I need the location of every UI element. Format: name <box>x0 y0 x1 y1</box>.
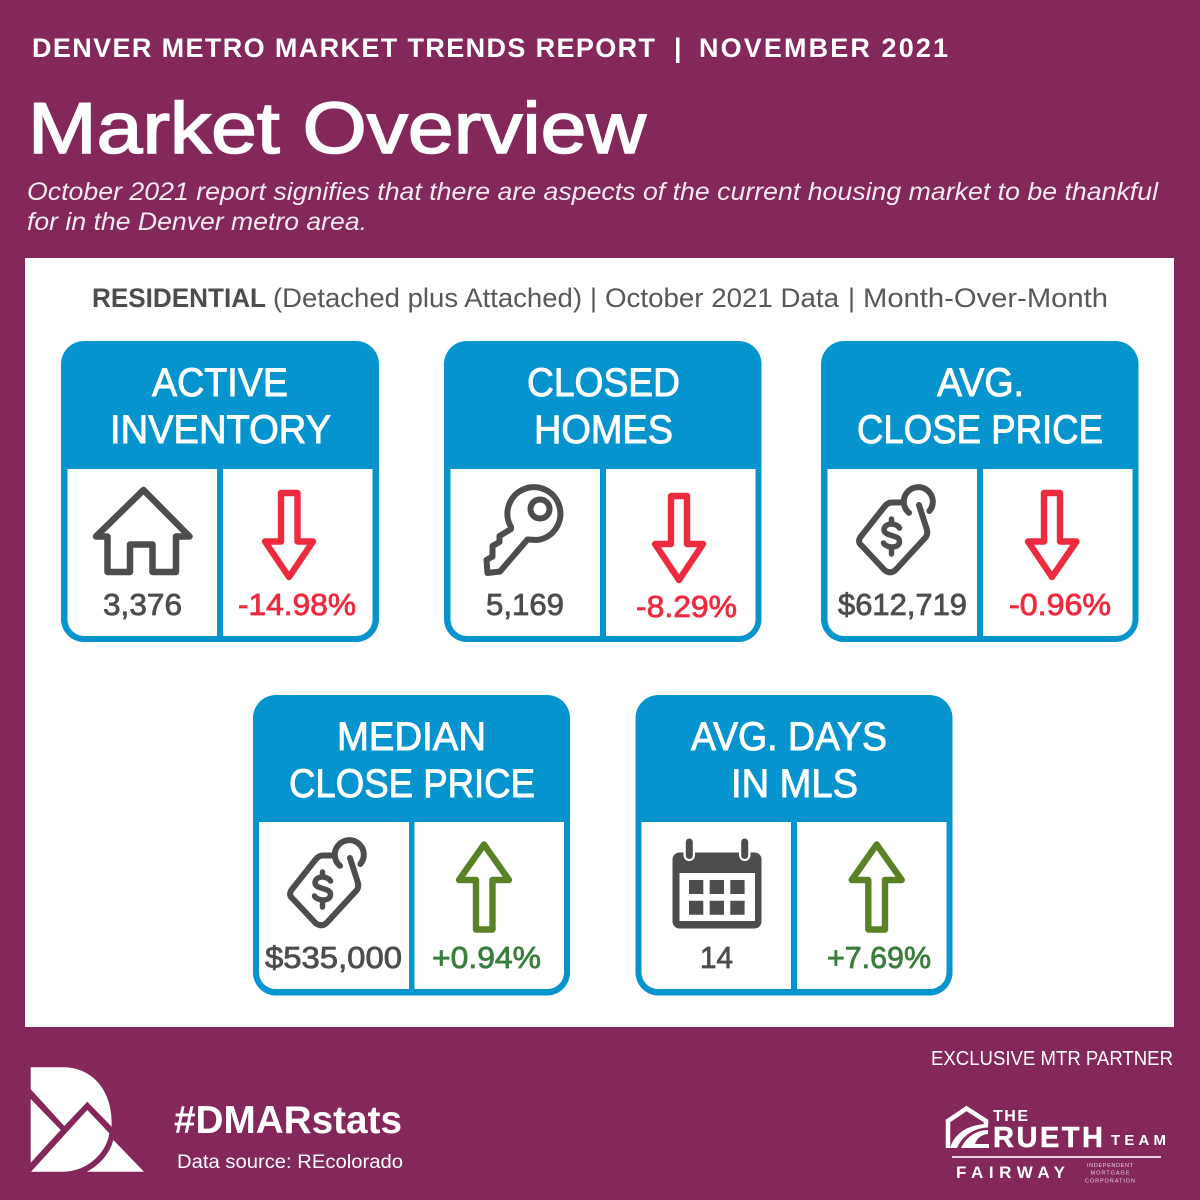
arrow: down <box>265 493 313 577</box>
arrow: down <box>655 496 703 580</box>
card heading: MEDIAN <box>337 715 486 759</box>
logo: DMAR <box>31 1067 144 1172</box>
percent change: -0.96% <box>1009 587 1111 622</box>
percent change: +7.69% <box>827 940 931 975</box>
panel subheading: | <box>848 283 855 313</box>
card: median close price <box>253 695 570 996</box>
icon: price tag <box>290 840 364 925</box>
panel subheading: RESIDENTIAL <box>92 283 266 313</box>
panel: residential metrics <box>25 258 1174 1027</box>
percent change: -14.98% <box>238 587 356 622</box>
icon: house <box>96 490 190 572</box>
card heading: AVG. <box>937 361 1024 405</box>
subtitle <box>27 178 1160 236</box>
card heading <box>857 361 1103 452</box>
card heading <box>691 715 887 806</box>
arrow: down <box>1028 493 1076 577</box>
card heading: HOMES <box>534 408 673 452</box>
percent change: -8.29% <box>636 589 737 624</box>
icon: house swoosh <box>948 1108 989 1148</box>
text: team: TEAM <box>1111 1132 1166 1149</box>
title: Market Overview <box>28 89 647 169</box>
report heading: | <box>674 33 682 63</box>
value: 5,169 <box>486 587 564 622</box>
value: $535,000 <box>265 940 402 975</box>
icon: calendar <box>672 834 762 928</box>
panel subheading: (Detached plus Attached) <box>273 283 582 313</box>
panel subheading: | <box>590 283 597 313</box>
subtitle: October 2021 report signifies that there are aspects of the current housing market to be thankful <box>27 178 1160 206</box>
arrow: up <box>459 844 509 930</box>
hashtag: #DMARstats <box>174 1099 402 1142</box>
value: 14 <box>700 940 733 975</box>
report heading <box>32 33 948 63</box>
text: independent mortgage corporation: CORPORATION <box>1085 1178 1135 1184</box>
card: average days in MLS <box>636 695 952 996</box>
text: fairway: FAIRWAY <box>956 1163 1066 1182</box>
card heading: INVENTORY <box>110 408 331 452</box>
text: rueth: RUETH <box>993 1122 1103 1154</box>
card heading: ACTIVE <box>152 361 288 405</box>
value: 3,376 <box>103 587 182 622</box>
panel subheading <box>92 283 1108 313</box>
text: the: THE <box>993 1108 1028 1125</box>
card heading: AVG. DAYS <box>691 715 887 759</box>
panel subheading: Month-Over-Month <box>863 283 1108 313</box>
panel subheading: October 2021 Data <box>605 283 840 313</box>
card: average close price <box>821 341 1138 642</box>
card: active inventory <box>61 341 379 642</box>
percent change: +0.94% <box>432 940 541 975</box>
text: independent mortgage corporation: MORTGAGE <box>1090 1170 1130 1176</box>
icon: key <box>486 487 560 573</box>
data source: Data source: REcolorado <box>177 1152 403 1173</box>
card heading: CLOSE PRICE <box>289 762 535 806</box>
report heading: DENVER METRO MARKET TRENDS REPORT <box>32 33 656 63</box>
card heading: CLOSED <box>527 361 680 405</box>
arrow: up <box>852 844 902 930</box>
subtitle: for in the Denver metro area. <box>27 208 367 236</box>
partner label: EXCLUSIVE MTR PARTNER <box>931 1048 1173 1070</box>
card: closed homes <box>444 341 762 642</box>
report heading: NOVEMBER 2021 <box>699 33 948 63</box>
card heading <box>527 361 680 452</box>
value: $612,719 <box>838 587 967 622</box>
card heading: CLOSE PRICE <box>857 408 1103 452</box>
card heading <box>110 361 331 452</box>
logo: The Rueth Team Fairway <box>948 1108 1166 1184</box>
icon: price tag <box>859 487 933 572</box>
text: independent mortgage corporation: INDEPENDENT <box>1087 1163 1134 1169</box>
text: independent mortgage corporation <box>1085 1163 1135 1184</box>
card heading: IN MLS <box>731 762 858 806</box>
card heading <box>289 715 535 806</box>
